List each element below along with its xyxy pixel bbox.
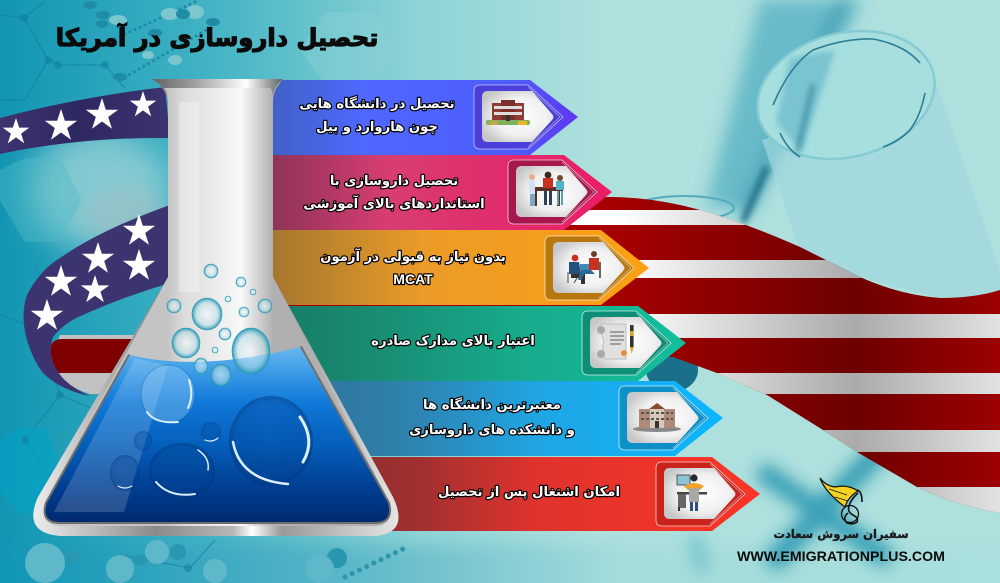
logo — [737, 478, 945, 564]
icon plate 2 — [508, 160, 597, 224]
hexagon molecule lines — [1, 1, 215, 568]
text line group 2 — [303, 174, 485, 212]
icon: person at computer desk — [677, 474, 707, 511]
panel: banner 5 — [270, 381, 723, 456]
lower right shadow bands — [695, 450, 890, 572]
panel: banner 6 — [270, 457, 760, 531]
text line group 5: معتبرترین دانشگاه ها — [423, 397, 561, 413]
liquid — [46, 347, 389, 522]
panel: banner 1 — [270, 80, 578, 155]
flag stripes left curl — [50, 335, 175, 394]
text line group 5: و دانشکده های داروسازی — [409, 423, 575, 438]
text: website: WWW.EMIGRATIONPLUS.COM — [737, 548, 945, 564]
icon: university building — [486, 100, 530, 125]
flask inner edge shading — [46, 347, 389, 522]
navy band lower with stars — [24, 205, 170, 396]
flask — [33, 79, 399, 536]
flask metal outline — [33, 79, 399, 536]
icon plate 3 — [545, 236, 634, 300]
navy band upper with stars — [0, 87, 170, 154]
molecule beads bottom — [25, 540, 405, 583]
icon plate 1 — [474, 85, 563, 149]
text line group 3: بدون نیاز به قبولی در آزمون — [320, 248, 506, 265]
bubbles above liquid — [167, 264, 272, 386]
text: اعتبار بالای مدارک صادره — [371, 334, 535, 349]
text line group 5 — [409, 397, 575, 438]
flask rim — [152, 79, 283, 100]
flask glass — [44, 88, 390, 526]
text line group 1: چون هاروارد و بیل — [316, 120, 438, 135]
panel: banner 3 — [270, 230, 649, 305]
molecule beads top — [83, 1, 220, 81]
text line group 3 — [320, 248, 506, 287]
icon: three people at lab table — [529, 172, 564, 206]
icon plate 5 — [619, 386, 708, 450]
panel: banner 2 — [270, 155, 612, 230]
text line group 2: تحصیل داروسازی با — [330, 174, 458, 189]
title: تحصیل داروسازی در آمریکا — [56, 22, 378, 52]
text line group 1: تحصیل در دانشگاه هایی — [299, 96, 455, 112]
text line group 3: MCAT — [393, 271, 433, 287]
text line group 1 — [299, 96, 455, 135]
icon plate 4 — [582, 311, 671, 375]
test tubes — [634, 0, 1000, 392]
bubbles in liquid — [110, 365, 313, 499]
panel: banner 4 — [270, 306, 686, 381]
icon: two people talking — [568, 251, 600, 284]
icon plate 6 — [656, 462, 745, 526]
flag stripes right — [274, 197, 1000, 517]
icon: certificate and pen — [597, 324, 634, 359]
text line group 2: استانداردهای بالای آموزشی — [303, 195, 485, 212]
american flag ribbon — [0, 87, 1000, 517]
text: company name: سفیران سروش سعادت — [773, 527, 909, 542]
text: امکان اشتغال پس از تحصیل — [438, 485, 620, 500]
icon: college building — [633, 403, 681, 432]
icon: winged emblem — [820, 478, 862, 524]
